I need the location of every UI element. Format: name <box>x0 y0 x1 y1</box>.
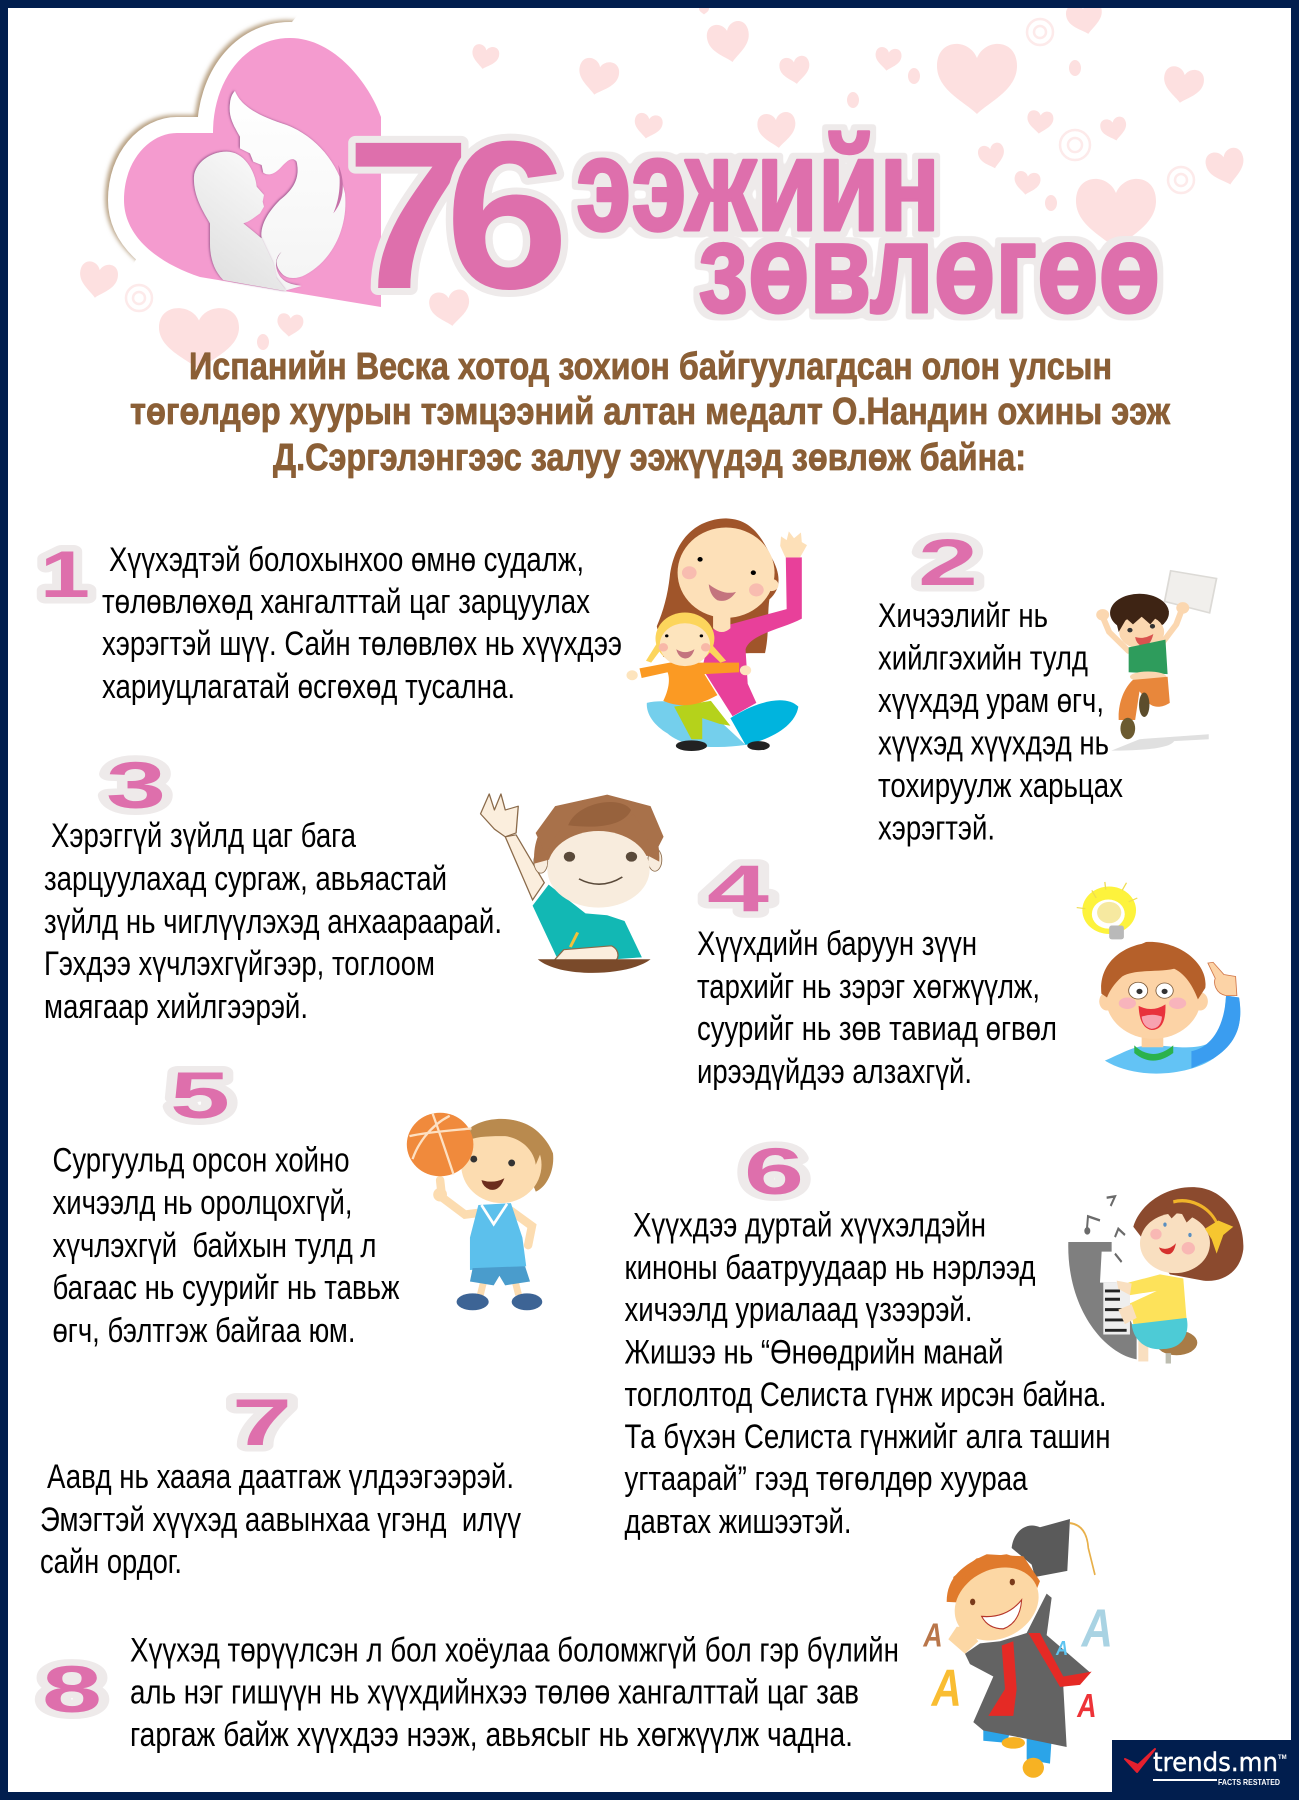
logo: trends.mn: trends.mn <box>1153 1748 1278 1778</box>
number 7: 7 <box>232 1385 292 1459</box>
illustration: boy spinning basketball <box>407 1113 553 1310</box>
text block 5: багаас нь суурийг нь тавьж <box>52 1269 400 1307</box>
illustration: mother with daughter <box>626 518 807 751</box>
text block 7: Эмэгтэй хүүхэд аавынхаа үгэнд илүү <box>40 1501 521 1539</box>
text block 6 <box>624 1206 1110 1541</box>
text block 2 <box>878 597 1123 848</box>
text block 3: зарцуулахад сургаж, авьяастай <box>44 860 447 898</box>
text block 6: давтах жишээтэй. <box>624 1503 852 1541</box>
text block 2: хүүхдэд урам өгч, <box>878 682 1104 720</box>
text block 5 <box>52 1142 400 1350</box>
text block 5: хүчлэхгүй байхын тулд л <box>52 1227 376 1265</box>
text block 5: Сургуульд орсон хойно <box>52 1142 350 1180</box>
subheading <box>130 346 1171 479</box>
logo: trends.mn <box>1112 1740 1291 1792</box>
text block 8 <box>130 1632 899 1754</box>
text block 5: хичээлд нь оролцохгүй, <box>52 1184 352 1222</box>
text block 3: Гэхдээ хүчлэхгүйгээр, тоглоом <box>44 945 435 983</box>
number 3: 3 <box>106 748 166 822</box>
icon: mother and baby heart logo <box>124 38 381 307</box>
text block 1: төлөвлөхөд хангалттай цаг зарцуулах <box>102 583 590 621</box>
number 8: 8 <box>42 1652 102 1726</box>
number 1: 1 <box>40 537 90 611</box>
text block 5: өгч, бэлтгэж байгаа юм. <box>52 1312 356 1350</box>
text block 1: хариуцлагатай өсгөхөд тусална. <box>102 668 515 706</box>
text block 3: маягаар хийлгээрэй. <box>44 988 308 1026</box>
title number 76 <box>346 97 569 333</box>
text block 2: хийлгэхийн тулд <box>878 640 1088 678</box>
illustration: boy with idea light bulb <box>1077 882 1240 1074</box>
text block 3: Хэрэггүй зүйлд цаг бага <box>51 817 356 855</box>
title number 76: 7 <box>346 97 471 333</box>
text block 3: зүйлд нь чиглүүлэхэд анхаараарай. <box>44 903 502 941</box>
illustration: boy raising hand at desk <box>481 794 664 973</box>
title line: зөвлөгөө: зөвлөгөө <box>698 197 1160 339</box>
text block 8: Хүүхэд төрүүлсэн л бол хоёулаа боломжгүй бол гэр бүлийн <box>130 1632 899 1670</box>
title line: ээжийн: ээжийн <box>576 111 940 258</box>
text block 2: хэрэгтэй. <box>878 810 995 848</box>
logo: trends.mn: FACTS RESTATED <box>1218 1777 1280 1787</box>
illustration: jumping boy with paper <box>1096 571 1217 751</box>
text block 2: Хичээлийг нь <box>878 597 1048 635</box>
text block 6: угтаарай” гээд төгөлдөр хуураа <box>624 1460 1028 1498</box>
illustration: graduate boy with letters: A <box>931 1658 962 1717</box>
illustration: graduate boy with letters: A <box>1076 1689 1097 1725</box>
text block 6: Жишээ нь “Өнөөдрийн манай <box>624 1334 1004 1372</box>
title number 76: 6 <box>445 97 569 333</box>
text block 4: тархийг нь зэрэг хөгжүүлж, <box>697 968 1040 1006</box>
number 2: 2 <box>918 525 978 599</box>
text block 2: хүүхэд хүүхдэд нь <box>878 724 1109 762</box>
number 4: 4 <box>707 851 769 925</box>
text block 6: тоглолтод Селиста гүнж ирсэн байна. <box>624 1376 1106 1414</box>
illustration: graduate boy with letters: A <box>1055 1636 1068 1659</box>
text block 3 <box>44 817 502 1026</box>
number 5: 5 <box>170 1058 230 1132</box>
text block 7 <box>40 1458 521 1581</box>
text block 6: Та бүхэн Селиста гүнжийг алга ташин <box>624 1418 1110 1456</box>
text block 8: гаргаж байж хүүхдээ нээж, авьясыг нь хөгжүүлж чадна. <box>130 1716 853 1754</box>
text block 1: хэрэгтэй шүү. Сайн төлөвлөх нь хүүхдээ <box>102 625 622 663</box>
illustration: graduate boy with letters: A <box>1081 1599 1113 1659</box>
number 6: 6 <box>744 1134 804 1208</box>
background hearts decoration <box>76 0 1249 369</box>
text block 4: суурийг нь зөв тавиад өгвөл <box>697 1010 1057 1048</box>
logo: trends.mn: TM <box>1278 1755 1287 1761</box>
text block 6: киноны баатруудаар нь нэрлээд <box>624 1249 1036 1287</box>
text block 6: Хүүхдээ дуртай хүүхэлдэйн <box>633 1206 986 1244</box>
text block 8: аль нэг гишүүн нь хүүхдийнхээ төлөө хангалттай цаг зав <box>130 1674 859 1712</box>
illustration: graduate boy with letters: A <box>922 1618 943 1654</box>
text block 1 <box>102 541 622 706</box>
text block 1: Хүүхэдтэй болохынхоо өмнө судалж, <box>109 541 584 579</box>
text block 4: Хүүхдийн баруун зүүн <box>697 925 977 963</box>
text block 2: тохируулж харьцах <box>878 767 1123 805</box>
illustration: girl playing piano <box>1068 1187 1243 1364</box>
text block 7: сайн ордог. <box>40 1543 182 1581</box>
text block 4 <box>697 925 1057 1091</box>
text block 7: Аавд нь хааяа даатгаж үлдээгээрэй. <box>47 1458 514 1496</box>
illustration: graduate boy with letters <box>922 1519 1113 1778</box>
subheading: Д.Сэргэлэнгээс залуу ээжүүдэд зөвлөж байна: <box>273 437 1026 479</box>
text block 6: хичээлд уриалаад үзээрэй. <box>624 1291 972 1329</box>
subheading: Испанийн Веска хотод зохион байгуулагдсан олон улсын <box>189 346 1112 388</box>
text block 4: ирээдүйдээ алзахгүй. <box>697 1053 972 1091</box>
